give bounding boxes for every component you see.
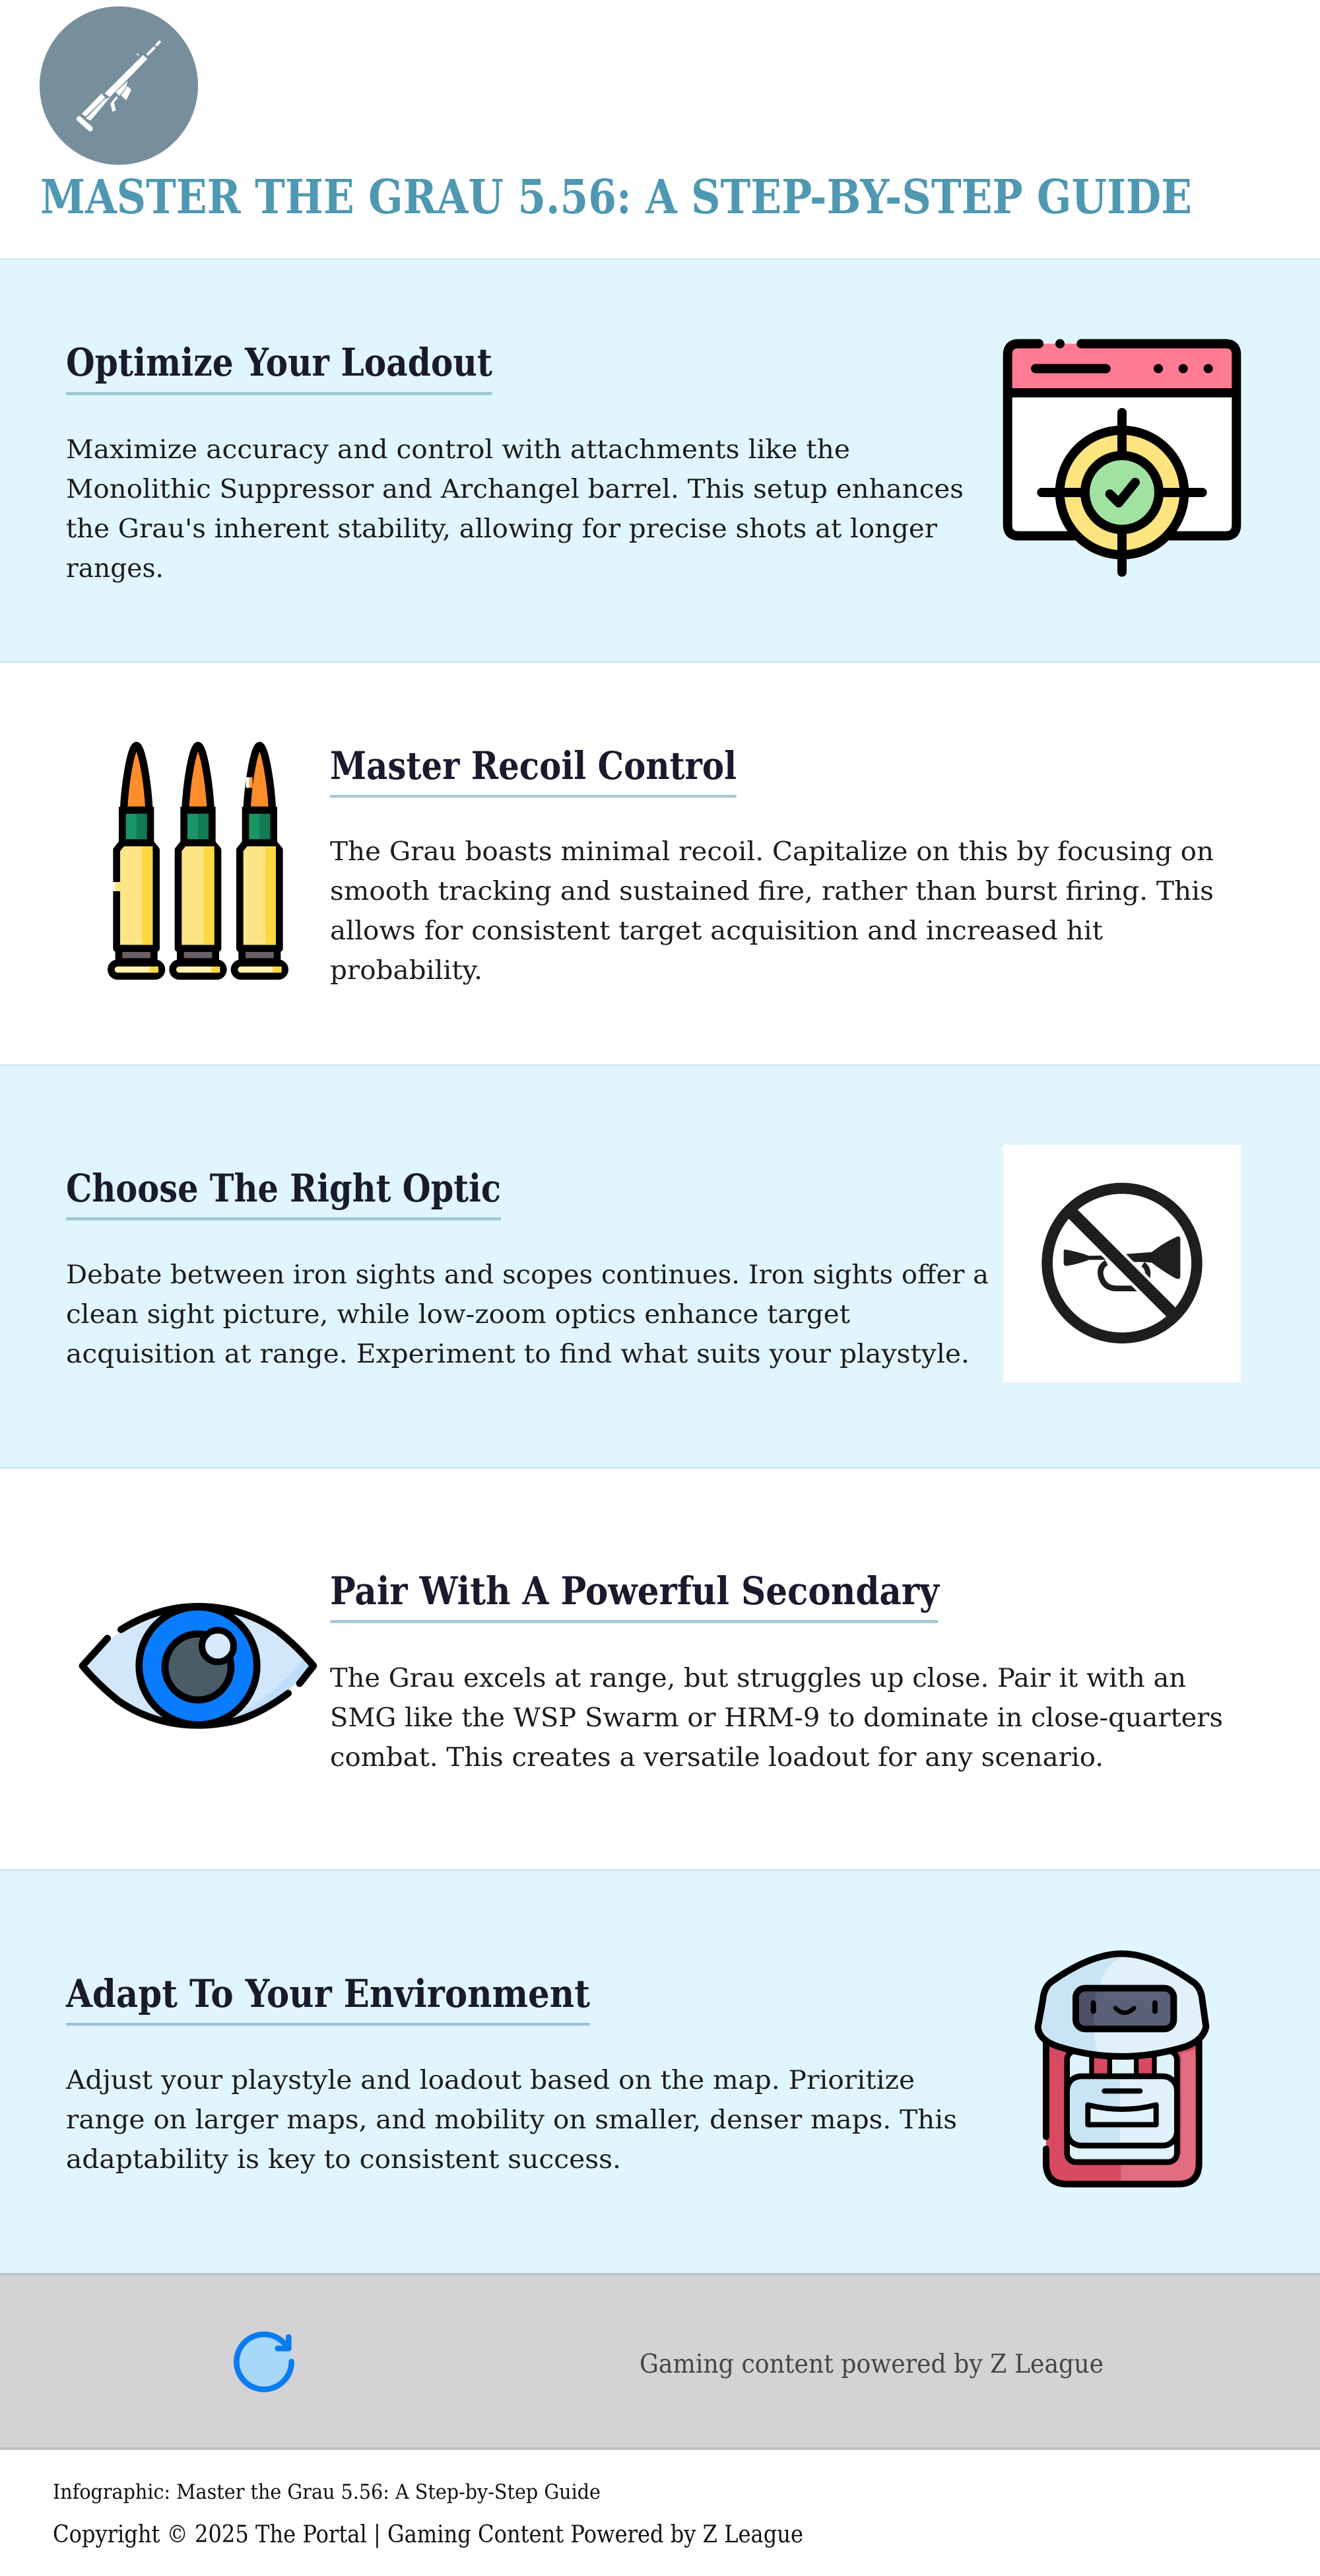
- text block: master recoil control: probability.: [330, 956, 482, 986]
- footer: [53, 2480, 803, 2548]
- icon: rifle badge: [40, 7, 198, 165]
- text block: pair with a powerful secondary: combat. This creates a versatile loadout for any scenario.: [330, 1743, 1104, 1773]
- text block: pair with a powerful secondary: [330, 1664, 1223, 1773]
- text block: optimize your loadout: [66, 435, 964, 584]
- heading: adapt to your environment: Adapt To Your Environment: [65, 1971, 590, 2016]
- text block: pair with a powerful secondary: The Grau excels at range, but struggles up close. Pair it with an: [330, 1664, 1186, 1693]
- text block: choose the right optic: acquisition at range. Experiment to find what suits your playstyle.: [66, 1339, 970, 1369]
- heading: choose the right optic: Choose The Right Optic: [66, 1166, 501, 1211]
- heading: pair with a powerful secondary: Pair With A Powerful Secondary: [330, 1569, 940, 1613]
- header: [40, 7, 1192, 224]
- text block: master recoil control: The Grau boasts minimal recoil. Capitalize on this by focusing on: [330, 837, 1214, 867]
- text block: adapt to your environment: range on larger maps, and mobility on smaller, denser maps. This: [66, 2105, 957, 2135]
- text block: adapt to your environment: adaptability is key to consistent success.: [66, 2145, 621, 2175]
- panel: optimize your loadout: [0, 258, 1320, 662]
- panel: master recoil control: [0, 661, 1320, 1065]
- icon: browser window with target: [1008, 344, 1236, 572]
- text block: adapt to your environment: Adjust your playstyle and loadout based on the map. Prioritize: [65, 2066, 915, 2095]
- heading: optimize your loadout: Optimize Your Loadout: [66, 340, 492, 385]
- text block: optimize your loadout: the Grau's inherent stability, allowing for precise shots at longer: [66, 514, 937, 544]
- icon: refresh: [236, 2334, 292, 2389]
- text block: choose the right optic: [66, 1260, 989, 1369]
- icon: backpack: [1038, 1953, 1206, 2184]
- text block: optimize your loadout: Monolithic Suppressor and Archangel barrel. This setup enhances: [66, 475, 964, 504]
- panel: pair with a powerful secondary: [0, 1467, 1320, 1870]
- text: powered by: Gaming content powered by Z League: [640, 2350, 1104, 2379]
- text block: choose the right optic: Debate between iron sights and scopes continues. Iron sights offer a: [66, 1260, 989, 1290]
- text block: adapt to your environment: [65, 2066, 957, 2175]
- text block: master recoil control: allows for consistent target acquisition and increased hit: [330, 916, 1103, 946]
- text block: optimize your loadout: ranges.: [66, 554, 164, 584]
- heading: master recoil control: Master Recoil Control: [330, 743, 737, 788]
- panel: powered-by band: [0, 2273, 1320, 2450]
- footer line: copyright: Copyright © 2025 The Portal | Gaming Content Powered by Z League: [53, 2521, 803, 2548]
- panel: choose the right optic: [0, 1064, 1320, 1468]
- text block: master recoil control: [330, 837, 1214, 986]
- text block: choose the right optic: clean sight picture, while low-zoom optics enhance target: [66, 1300, 850, 1330]
- text block: master recoil control: smooth tracking and sustained fire, rather than burst firing. This: [330, 877, 1214, 906]
- icon: no horn sign: [1003, 1145, 1241, 1382]
- icon: blue eye: [82, 1606, 314, 1725]
- text block: optimize your loadout: Maximize accuracy and control with attachments like the: [66, 435, 850, 465]
- icon: three bullets: [111, 745, 285, 976]
- footer line: infographic name: Infographic: Master the Grau 5.56: A Step-by-Step Guide: [53, 2480, 601, 2504]
- panel: adapt to your environment: [0, 1869, 1320, 2273]
- text block: pair with a powerful secondary: SMG like the WSP Swarm or HRM-9 to dominate in close-quarters: [330, 1703, 1223, 1733]
